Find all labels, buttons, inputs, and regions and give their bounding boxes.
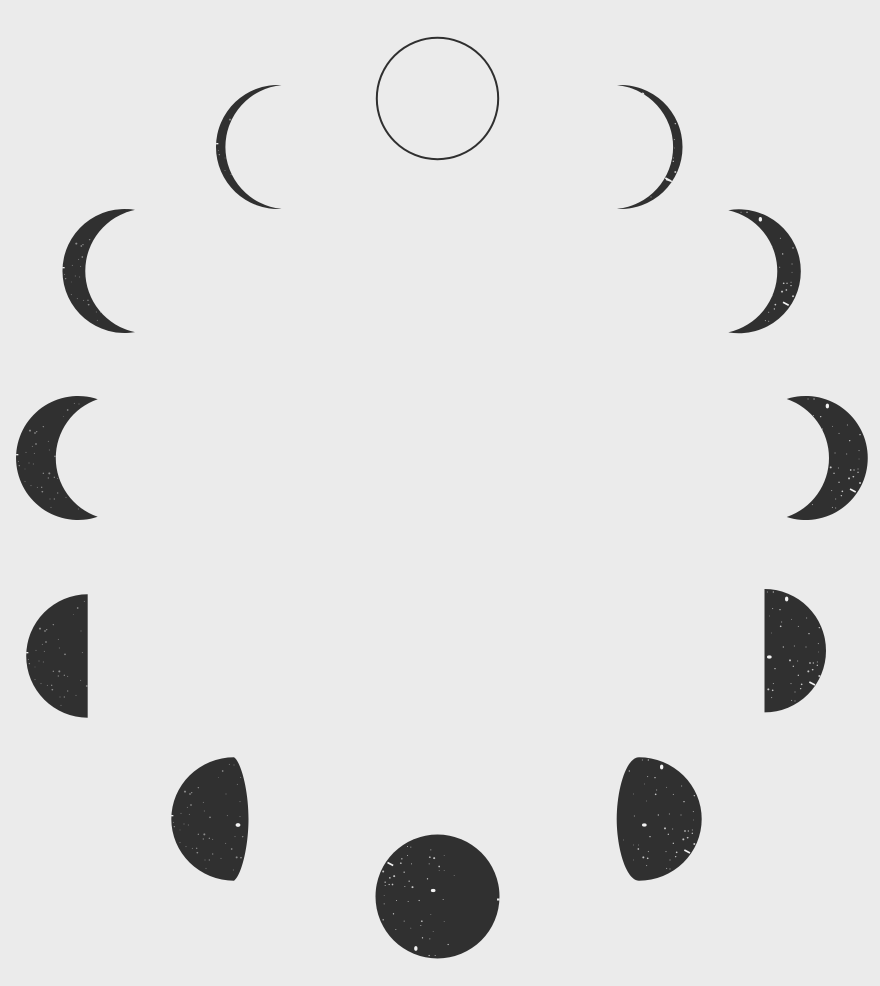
icon: full moon (376, 834, 500, 958)
icon: wide crescent left (15, 396, 98, 520)
icon: thin crescent right (617, 85, 682, 209)
icon: new moon outline (377, 38, 498, 159)
icon: half moon left (26, 594, 88, 718)
icon: gibbous left (170, 757, 248, 881)
icon: thin crescent left (216, 85, 282, 209)
icon: crescent right (722, 209, 801, 333)
icon: crescent left (61, 209, 135, 333)
icon: half moon right (764, 589, 826, 712)
icon: gibbous right (617, 757, 702, 881)
icon: wide crescent right (787, 396, 868, 520)
